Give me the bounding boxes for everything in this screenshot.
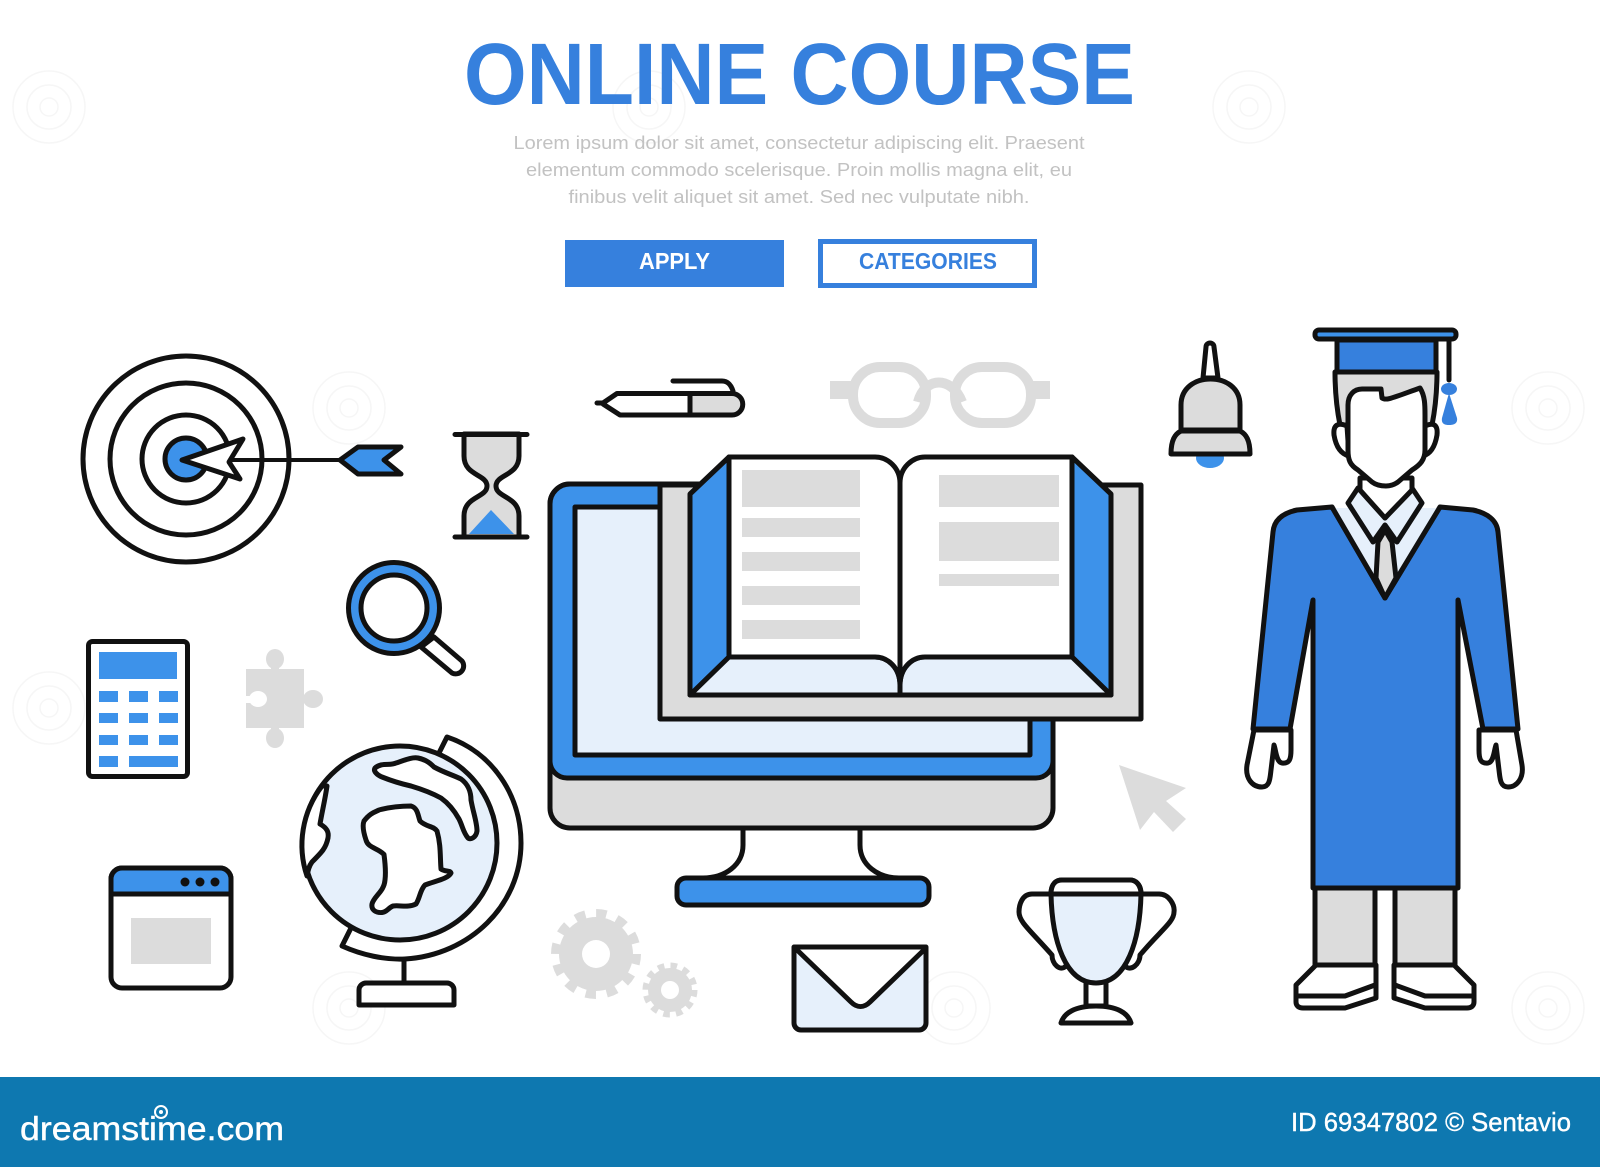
icon: pen xyxy=(597,381,743,415)
icon: globe xyxy=(302,737,521,1005)
graduate: shoes xyxy=(1296,965,1474,1008)
title: ONLINE COURSE xyxy=(464,26,1135,123)
icon: trophy xyxy=(1019,880,1174,1023)
graduate: shirt and collar xyxy=(1332,488,1440,598)
icon: magnifier xyxy=(348,562,464,674)
icon: gears xyxy=(557,915,694,1014)
graduate: ears xyxy=(1334,424,1437,456)
intro text: elementum commodo scelerisque. Proin mollis magna elit, eu xyxy=(526,160,1072,180)
icon: desktop monitor xyxy=(550,484,1053,905)
footer credit: ID 69347802 © Sentavio xyxy=(1291,1107,1571,1137)
graduate: face xyxy=(1348,388,1425,486)
icon: calculator xyxy=(88,642,188,776)
icon: bell xyxy=(1171,343,1250,468)
intro text: finibus velit aliquet sit amet. Sed nec vulputate nibh. xyxy=(568,187,1030,207)
panel: gray backing xyxy=(660,485,1141,719)
graduate: hair xyxy=(1335,372,1437,425)
icon: browser window xyxy=(111,868,231,988)
footer band xyxy=(0,1077,1600,1167)
icon: envelope xyxy=(794,947,926,1030)
icon: target with arrow xyxy=(83,356,401,562)
icon: open book xyxy=(690,457,1111,695)
graduate: hands xyxy=(1247,730,1522,787)
button: categories: CATEGORIES xyxy=(859,248,997,274)
icon: puzzle piece xyxy=(245,649,323,748)
button: categories xyxy=(820,242,1034,286)
graduate: gown xyxy=(1253,507,1518,888)
icon: glasses xyxy=(830,367,1050,423)
button: apply: APPLY xyxy=(639,248,710,274)
graduate: legs xyxy=(1315,885,1455,965)
icon: cursor arrow xyxy=(1119,765,1186,832)
footer logo: dreamstime.com xyxy=(20,1110,284,1147)
intro text xyxy=(514,133,1084,207)
button: apply xyxy=(565,240,784,287)
graduate: neck xyxy=(1360,478,1412,518)
graduate: cap xyxy=(1315,330,1457,425)
intro text: Lorem ipsum dolor sit amet, consectetur adipiscing elit. Praesent xyxy=(514,133,1084,153)
icon: hourglass xyxy=(455,434,527,537)
character: graduate xyxy=(1247,330,1522,1008)
